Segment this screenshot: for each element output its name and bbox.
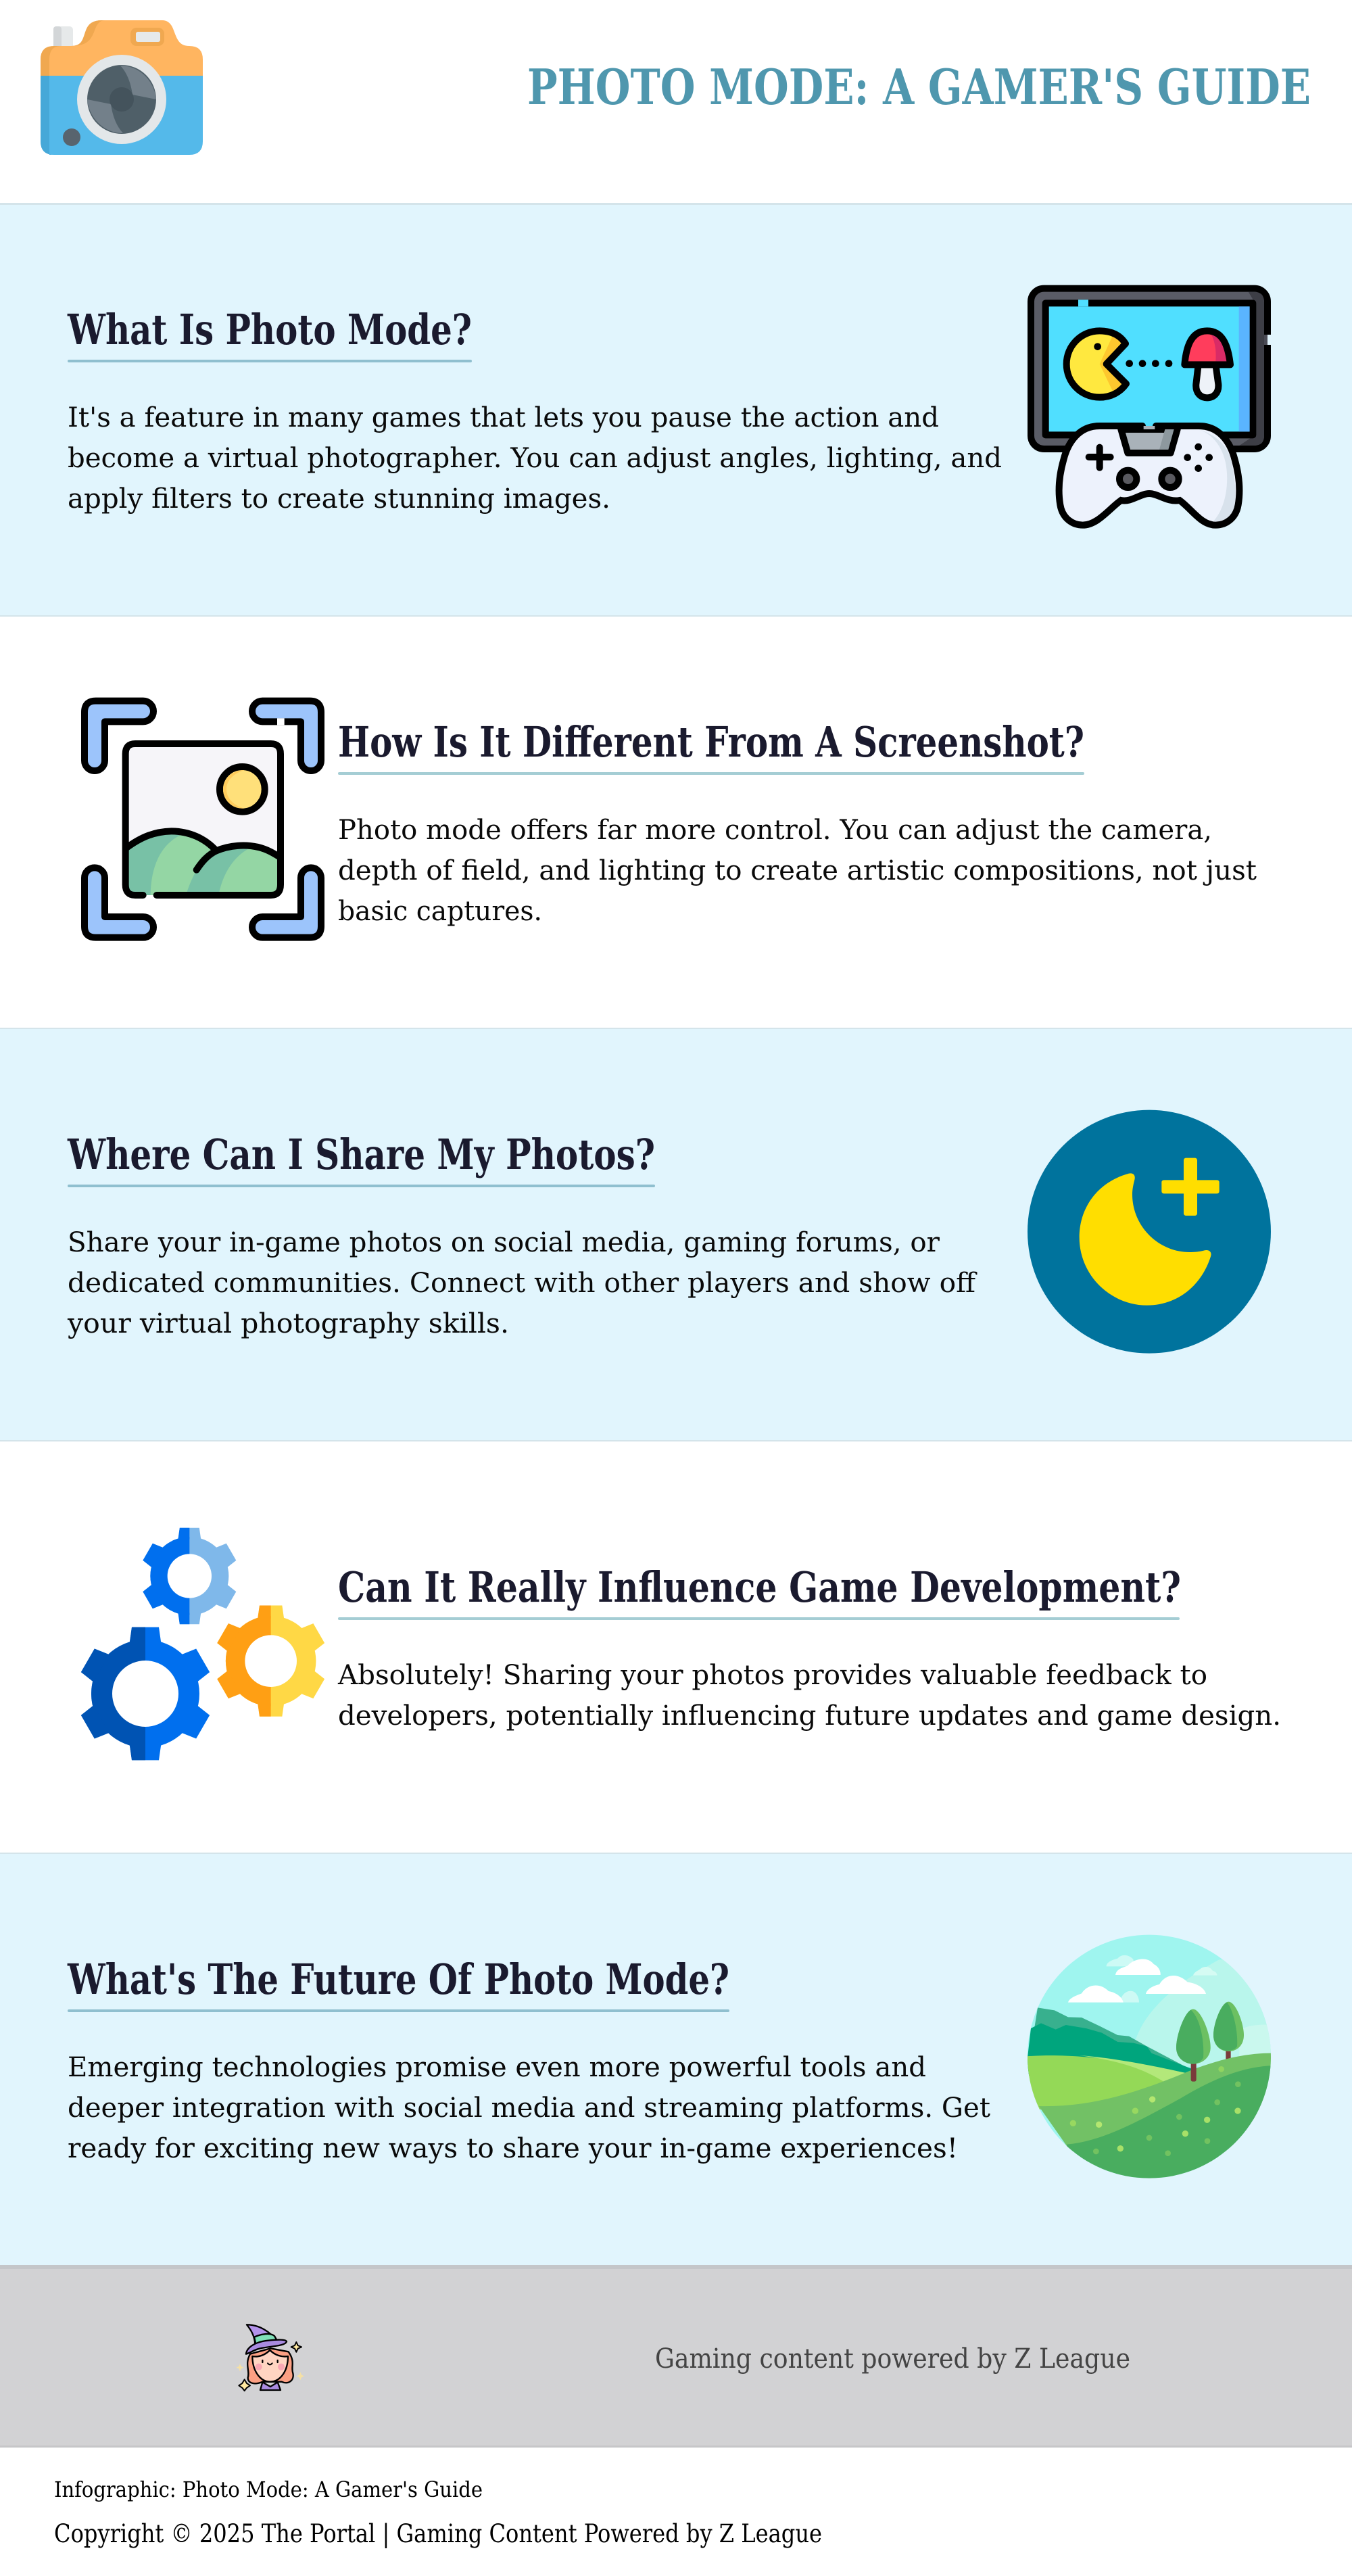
sponsor text: Gaming content powered by Z League: [655, 2343, 1130, 2375]
body text: depth of field, and lighting to create artistic compositions, not just: [338, 855, 1257, 886]
body text: become a virtual photographer. You can adjust angles, lighting, and: [68, 443, 1002, 474]
footer credits: [54, 2477, 822, 2548]
copyright: Copyright © 2025 The Portal | Gaming Content Powered by Z League: [54, 2519, 822, 2548]
body text: developers, potentially influencing future updates and game design.: [338, 1700, 1281, 1732]
heading underline: [68, 1185, 655, 1187]
icon: monitor with game controller: [1031, 289, 1272, 525]
mushroom: [1184, 331, 1230, 398]
heading: Where Can I Share My Photos?: [67, 1130, 655, 1179]
body text: It's a feature in many games that lets you pause the action and: [68, 402, 939, 433]
body text: your virtual photography skills.: [67, 1308, 509, 1339]
body text: Absolutely! Sharing your photos provides valuable feedback to: [337, 1660, 1207, 1691]
heading underline: [338, 772, 1084, 775]
heading: Can It Really Influence Game Development?: [338, 1563, 1181, 1612]
icon: witch mascot: [236, 2324, 304, 2391]
large blue gear: [80, 1627, 211, 1760]
pellets: [1126, 360, 1172, 367]
meadow flowers: [1070, 2066, 1241, 2156]
header: [0, 0, 1352, 204]
body text: dedicated communities. Connect with other players and show off: [68, 1268, 977, 1299]
tree front: [1176, 2009, 1211, 2082]
clouds: [1068, 1955, 1217, 2003]
heading underline: [338, 1617, 1180, 1620]
heading underline: [68, 360, 472, 362]
icon: moon and plus: [1028, 1110, 1271, 1354]
body text: [68, 2052, 990, 2164]
tree back: [1213, 2002, 1244, 2062]
orange gear: [216, 1606, 326, 1717]
panel: influence game development: [0, 1441, 1352, 1855]
body text: deeper integration with social media and streaming platforms. Get: [68, 2093, 990, 2124]
panel: different from a screenshot: [0, 617, 1352, 1030]
pacman: [1067, 331, 1126, 398]
heading: How Is It Different From A Screenshot?: [338, 717, 1084, 767]
controller: [1059, 426, 1239, 525]
body text: ready for exciting new ways to share your in-game experiences!: [68, 2133, 958, 2164]
picture frame: [126, 744, 281, 895]
panel: where can I share: [0, 1029, 1352, 1442]
body text: Emerging technologies promise even more powerful tools and: [68, 2052, 926, 2083]
body text: basic captures.: [338, 896, 542, 927]
heading: What's The Future Of Photo Mode?: [67, 1955, 729, 2004]
heading underline: [68, 2009, 729, 2012]
icon: camera: [41, 20, 203, 155]
panel: future of photo mode: [0, 1854, 1352, 2266]
body text: [338, 815, 1257, 927]
focus corners: [84, 701, 321, 938]
body text: Share your in-game photos on social media, gaming forums, or: [68, 1227, 940, 1258]
body text: [68, 402, 1002, 515]
body text: apply filters to create stunning images.: [68, 483, 610, 515]
infographic name: Infographic: Photo Mode: A Gamer's Guide: [54, 2477, 483, 2502]
icon: framed picture: [84, 701, 321, 938]
panel: what is photo mode: [0, 203, 1352, 617]
body text: Photo mode offers far more control. You can adjust the camera,: [338, 815, 1212, 846]
small blue gear: [142, 1528, 237, 1624]
heading: What Is Photo Mode?: [67, 305, 472, 354]
body text: [337, 1660, 1281, 1732]
icon: landscape: [1023, 1932, 1276, 2184]
footer band: sponsor: [0, 2265, 1352, 2448]
icon: gears: [80, 1528, 326, 1760]
body text: [67, 1227, 977, 1339]
